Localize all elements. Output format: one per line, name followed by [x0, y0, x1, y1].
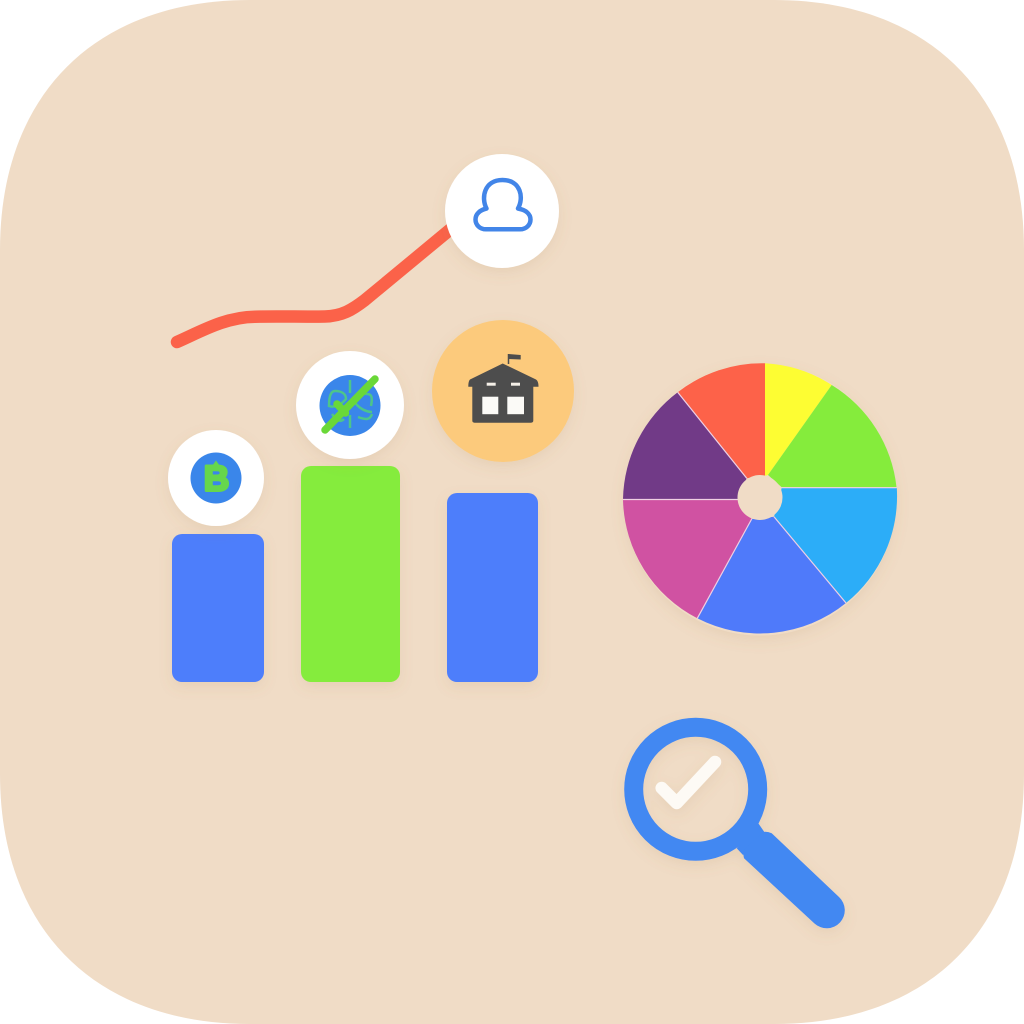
pie chart: [623, 363, 897, 636]
trend line: [177, 228, 452, 342]
bar: middle green: [301, 466, 400, 682]
icon: magnifying glass with check: [634, 727, 845, 928]
icon: letter B badge: B: [204, 460, 229, 498]
slice: red: [678, 363, 765, 478]
slice: yellow: [765, 363, 832, 476]
icon: house badge: [432, 320, 574, 462]
icon: globe check badge: [296, 351, 404, 459]
slice: blue: [697, 517, 846, 633]
bar: right blue: [447, 493, 538, 682]
slice: purple: [623, 392, 747, 499]
icon: letter B badge: [168, 430, 264, 526]
slice: green: [768, 385, 896, 487]
slice: pink: [623, 500, 752, 618]
slice: sky blue: [774, 488, 897, 603]
bar chart: [172, 466, 538, 682]
bar: left blue: [172, 534, 264, 682]
icon: user badge: [445, 154, 559, 268]
